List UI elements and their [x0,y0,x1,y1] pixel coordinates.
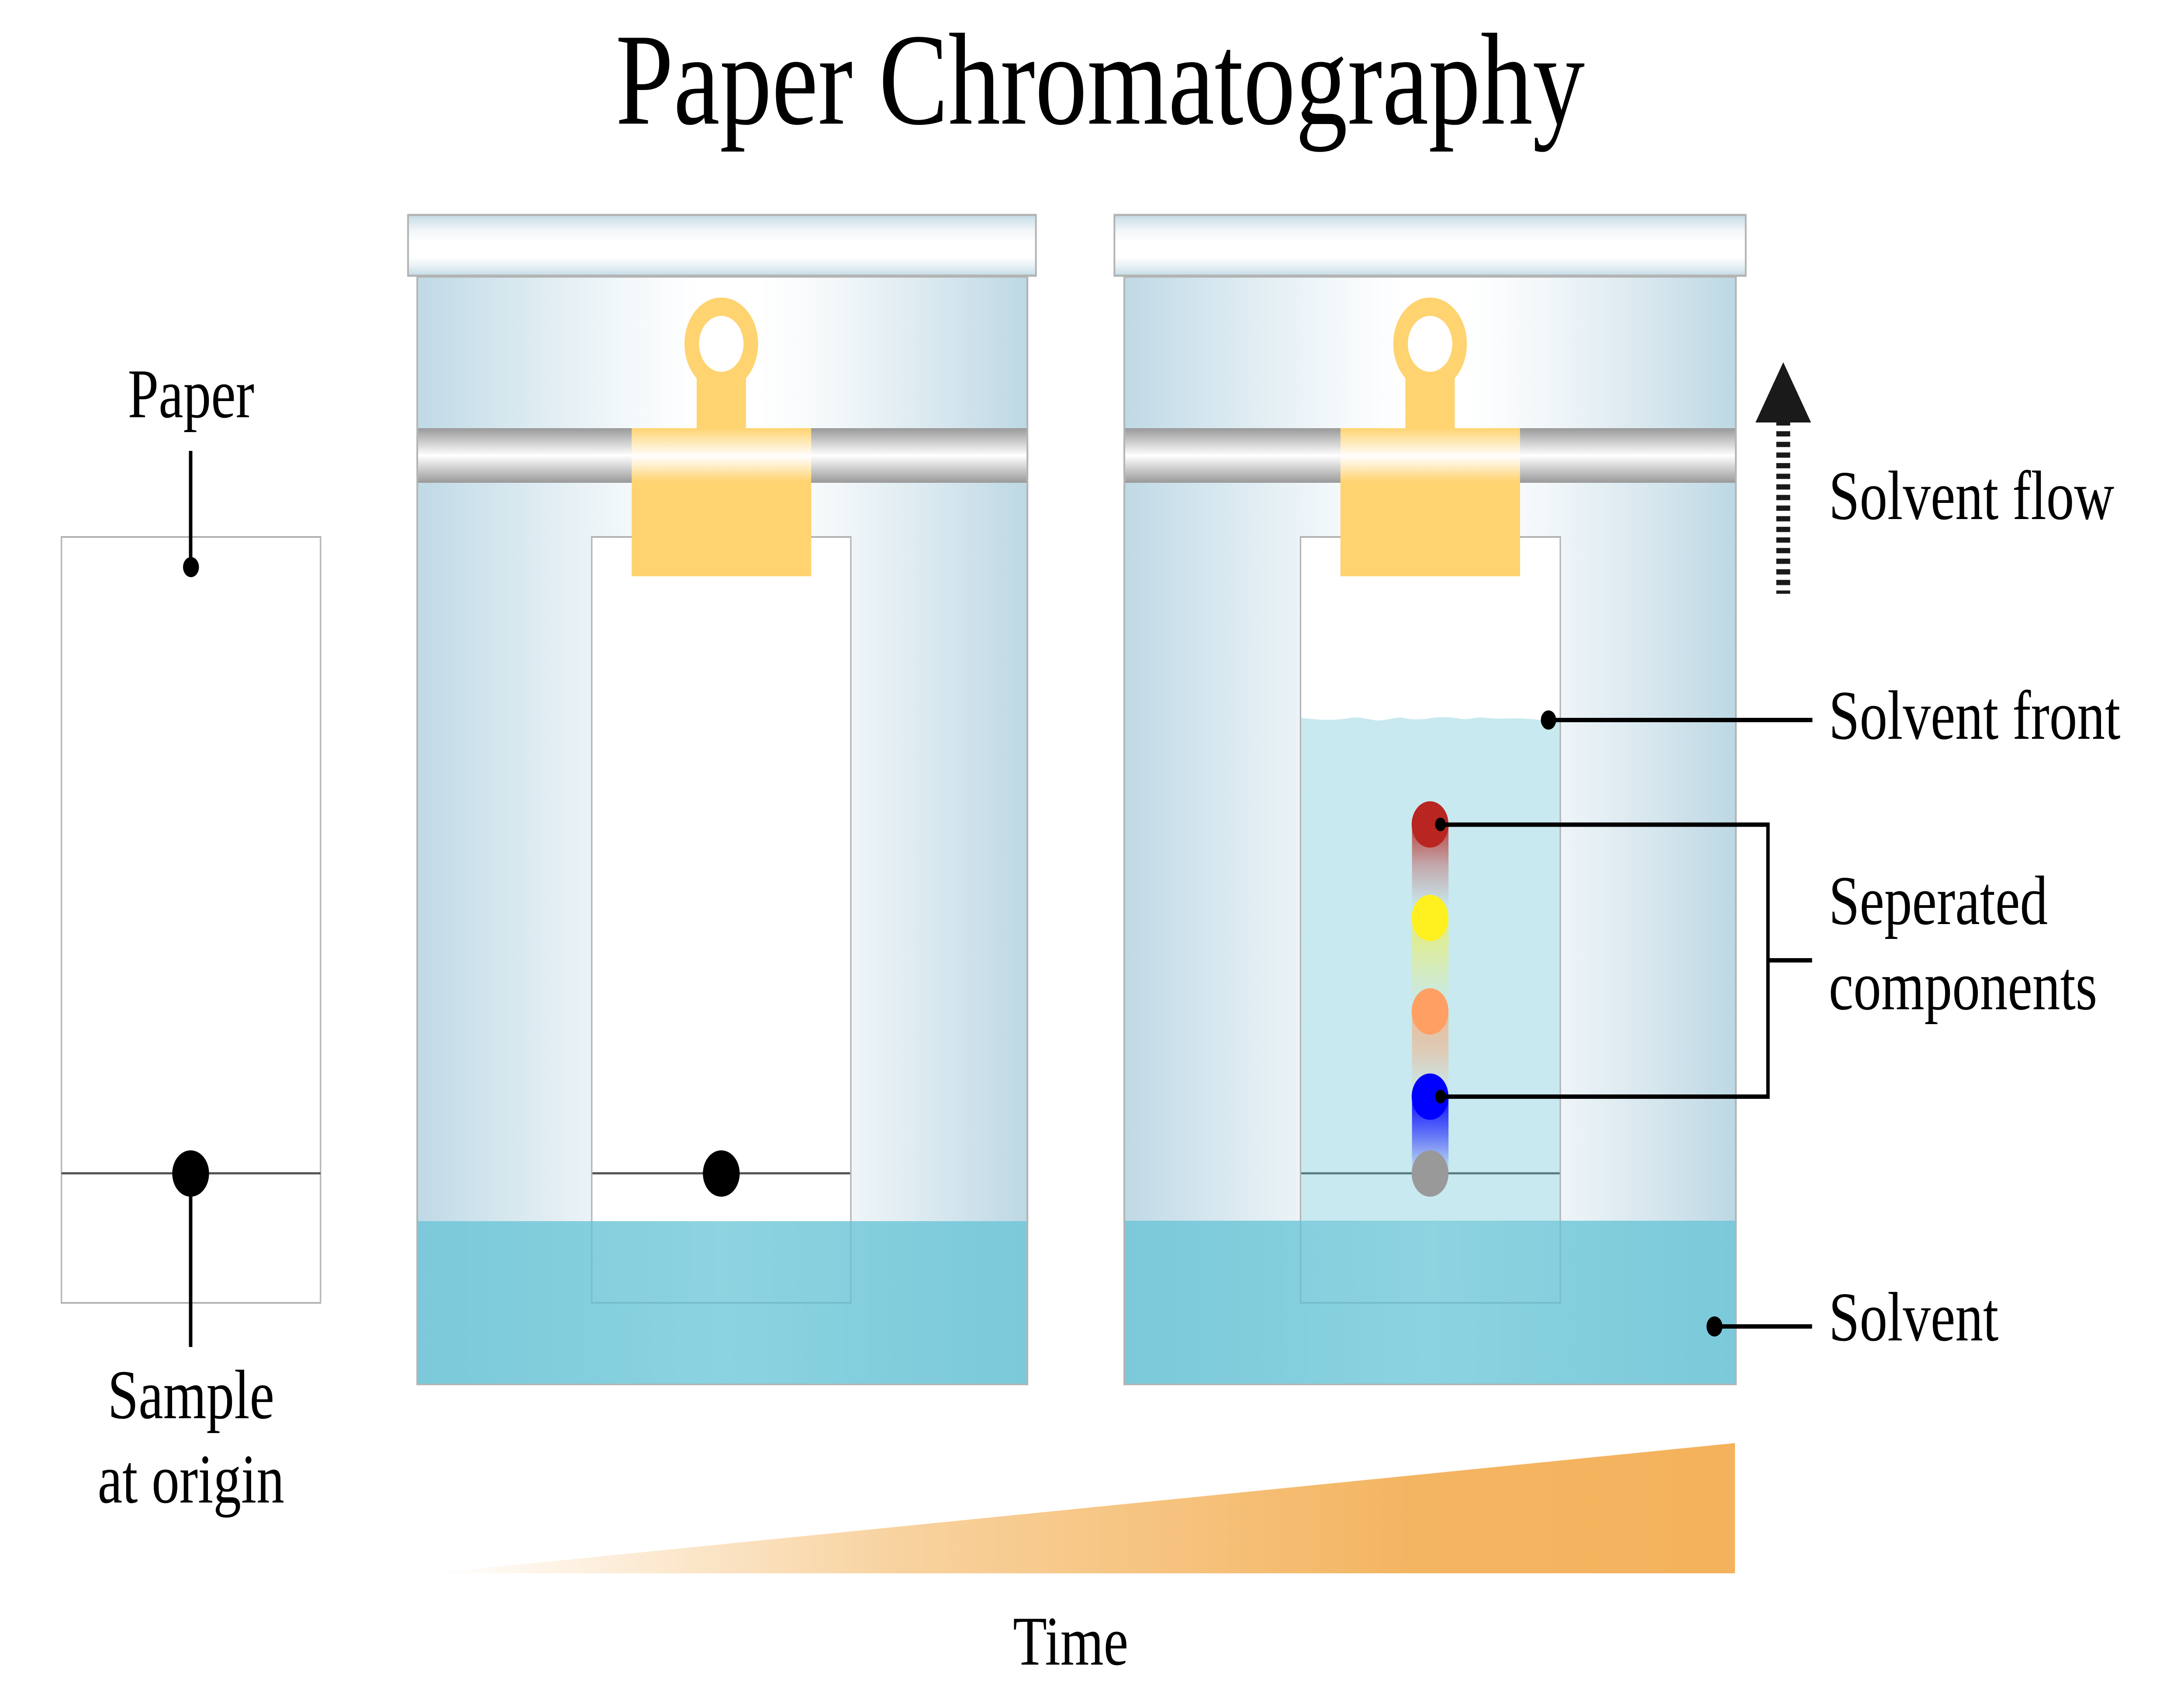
submerged paper edge [1300,1221,1560,1303]
callout: solvent front [1541,710,1812,730]
label: solvent front: Solvent front [1829,677,2120,754]
sample spot [703,1150,740,1197]
origin line [592,1172,850,1174]
spot: yellow [1412,895,1448,941]
label: separated components: components [1829,947,2097,1025]
panel: reference paper strip [62,355,321,1518]
chamber body [1124,277,1736,1384]
arrow: solvent flow [1755,362,1811,594]
callout: solvent [1707,1316,1812,1336]
solvent [1125,1221,1735,1384]
label: solvent: Solvent [1829,1278,1998,1356]
spot: blue [1412,1073,1448,1120]
callout: separated components bracket [1435,818,1812,1104]
label: sample at origin [98,1356,284,1518]
icon: clip [632,307,811,576]
streak: red band [1412,824,1448,907]
wet paper [1301,717,1560,1221]
spot: orange [1412,988,1448,1035]
panel: chamber after development [1114,215,1746,1384]
label: time: Time [1013,1603,1128,1680]
label: solvent flow: Solvent flow [1829,457,2114,534]
leader: paper [183,451,199,577]
label: sample at origin: at origin [98,1440,284,1518]
submerged paper edge [592,1221,851,1303]
support rod [418,428,1026,483]
leader: sample [188,1193,193,1347]
panel: chamber at start [408,215,1036,1384]
label: separated components [1829,862,2097,1025]
time wedge [432,1443,1735,1573]
label: paper: Paper [128,355,254,433]
support rod [1125,428,1735,483]
origin line [1301,1172,1560,1174]
sample spot [172,1150,209,1197]
icon: clip [1341,307,1520,576]
chamber body [417,277,1027,1384]
title: Paper Chromatography [615,7,1585,152]
chamber lid [1114,215,1746,276]
streak: orange band [1412,1011,1448,1092]
origin line [62,1172,321,1174]
spot: origin grey [1412,1150,1448,1197]
paper sheet [62,537,321,1303]
paper sheet [592,537,851,1303]
label: sample at origin: Sample [108,1356,274,1433]
solvent [418,1221,1026,1384]
streak: yellow band [1412,918,1448,1005]
label: separated components: Seperated [1829,862,2048,939]
streak: blue band [1412,1097,1448,1173]
spot: red [1412,801,1448,848]
paper sheet [1300,537,1560,1303]
chamber lid [408,215,1036,276]
